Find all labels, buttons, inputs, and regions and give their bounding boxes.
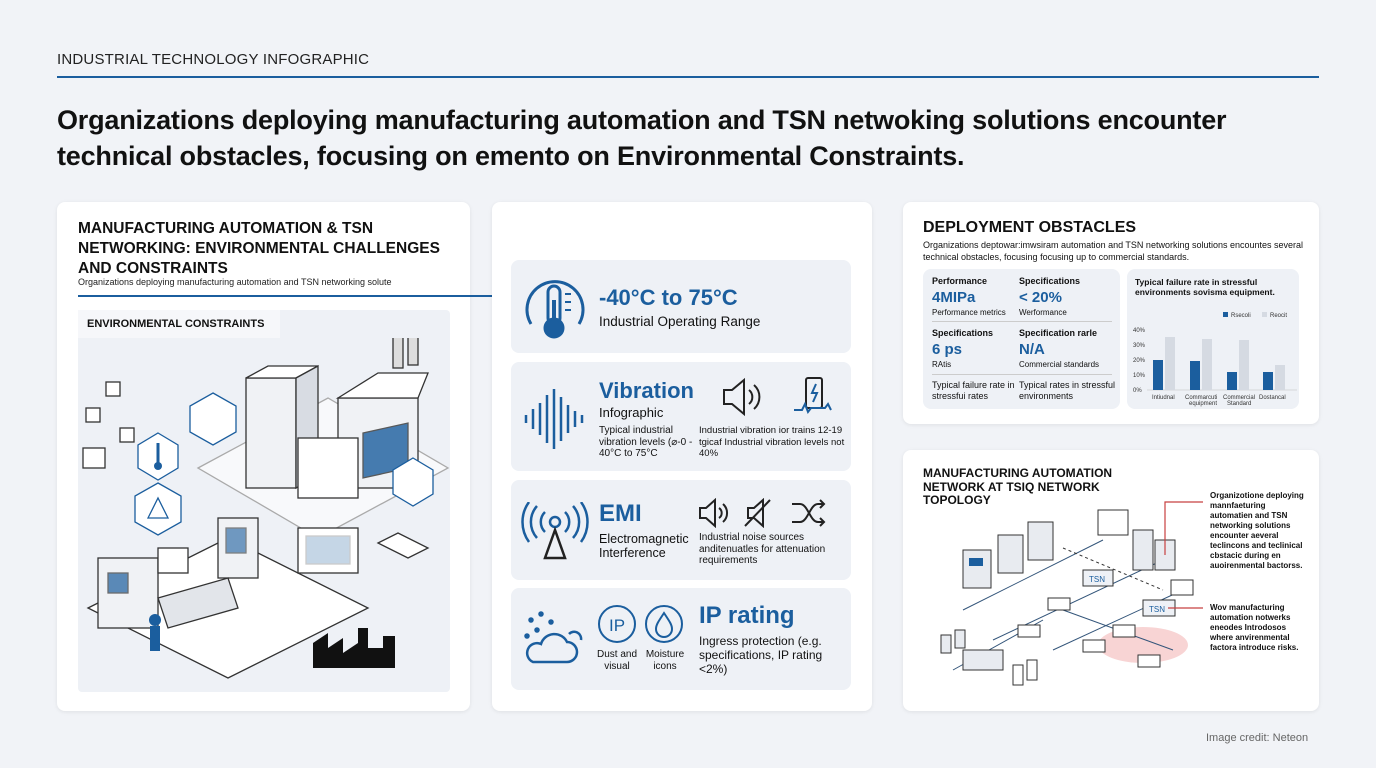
metrics grid: Typical rates in stressful environments <box>1019 380 1115 401</box>
metrics grid: RAtis <box>932 360 951 369</box>
icon: waveform <box>524 389 584 449</box>
metrics grid: Werformance <box>1019 308 1067 317</box>
bar chart: 0% <box>1133 388 1142 394</box>
metrics grid: N/A <box>1019 341 1045 358</box>
IP heading: IP rating <box>699 602 795 629</box>
bar chart: 20% <box>1133 358 1146 364</box>
metrics grid: Typical failure rate in stressfui rates <box>932 380 1015 401</box>
icon: antenna <box>521 502 589 560</box>
metrics grid <box>923 269 1120 409</box>
network diagram <box>940 510 1194 686</box>
panel heading: MANUFACTURING AUTOMATION & TSN NETWORKING: ENVIRONMENTAL CHALLENGES AND CONSTRAINTS <box>78 220 440 277</box>
card: EMI <box>511 480 851 580</box>
panel subtitle: Organizations deploying manufacturing automation and TSN networking solute <box>78 277 392 287</box>
metrics grid: Commercial standards <box>1019 360 1099 369</box>
network diagram: TSN <box>1149 605 1165 614</box>
label: environmental constraints: ENVIRONMENTAL CONSTRAINTS <box>87 318 264 330</box>
icons: speaker and phone <box>723 377 832 416</box>
icon: IP badge: IP <box>609 616 625 635</box>
card: IP rating: Moisture icons <box>646 649 684 672</box>
metrics grid: Performance <box>932 276 987 286</box>
bar chart: Commercial <box>1223 395 1255 401</box>
description: Organizations deptowar:imwsiram automation and TSN networking solutions encountes several technical obstacles, focusing focusing up to commercial standards. <box>923 240 1303 262</box>
panel: environmental factors <box>492 202 872 711</box>
metrics grid: Specification rarle <box>1019 328 1097 338</box>
callout lines <box>1164 501 1203 609</box>
icon captions: Dust and visual <box>597 649 637 672</box>
isometric factory illustration <box>82 338 450 679</box>
callout text 1: Organizotione deploying mannfaeturing automatien and TSN networking solutions encounter aeveral teclincons and teclinical cbstacic during en auoirenmental bactorss. <box>1210 491 1304 570</box>
EMI label <box>599 532 689 560</box>
card: vibration <box>511 362 851 471</box>
bar chart: Standard <box>1227 401 1251 407</box>
bar chart: Dostancal <box>1259 395 1286 401</box>
bar chart: Typical failure rate in stressful environments sovisma equipment. <box>1135 277 1275 297</box>
callout text 2: Wov manufacturing automation notwerks eneodes Introdosos where anvirenmental factora introduce risks. <box>1210 603 1298 652</box>
kicker: INDUSTRIAL TECHNOLOGY INFOGRAPHIC <box>57 51 369 68</box>
temperature value: -40°C to 75°C <box>599 285 738 310</box>
bar chart: Commarcuti <box>1185 395 1217 401</box>
metrics grid: Specifications <box>1019 276 1080 286</box>
title: Organizations deploying manufacturing automation and TSN netwoking solutions encounter technical obstacles, focusing on emento on Environmental Constraints. <box>57 105 1226 171</box>
panel: network topology <box>903 450 1319 711</box>
bar chart: equipment <box>1189 401 1217 407</box>
illustration box <box>78 310 450 692</box>
panel: environmental constraints <box>57 202 470 711</box>
card: temperature <box>511 260 851 353</box>
heading: MANUFACTURING AUTOMATION NETWORK AT TSIQ NETWORK TOPOLOGY <box>923 466 1112 507</box>
bar chart: Rsecoli <box>1231 313 1251 319</box>
icon: IP badge <box>598 605 683 643</box>
bar chart: Intiudnal <box>1152 395 1175 401</box>
divider line under left header <box>78 295 492 297</box>
EMI label: Interference <box>599 546 666 560</box>
metrics grid: 4MIPa <box>932 289 975 306</box>
panel: deployment obstacles <box>903 202 1319 424</box>
icon: dust cloud <box>524 611 582 664</box>
card: vibration: Infographic <box>599 405 663 420</box>
vibration heading: Vibration <box>599 378 694 403</box>
vibration text: Typical industrial vibration levels (⌀-0 - 40°C to 75°C <box>599 425 692 459</box>
credit: Image credit: Neteon <box>1206 732 1308 744</box>
metrics grid: < 20% <box>1019 289 1062 306</box>
heading: DEPLOYMENT OBSTACLES <box>923 219 1136 236</box>
bar chart: 40% <box>1133 328 1146 334</box>
vibration text 2: Industrial vibration ior trains 12-19 tgicaf Industrial vibration levels not 40% <box>699 425 844 459</box>
icon: thermometer gauge <box>525 280 584 338</box>
card: IP rating <box>511 588 851 690</box>
EMI heading: EMI <box>599 500 642 527</box>
label: environmental constraints <box>78 310 280 338</box>
metrics grid: 6 ps <box>932 341 962 358</box>
metrics grid: Performance metrics <box>932 308 1006 317</box>
icons: speaker, mute, shuffle <box>699 498 826 528</box>
metrics grid: Specifications <box>932 328 993 338</box>
temperature label: Industrial Operating Range <box>599 314 760 329</box>
bar chart <box>1127 269 1299 409</box>
network diagram: TSN <box>1089 575 1105 584</box>
bar chart: Reocit <box>1270 313 1287 319</box>
EMI text: Industrial noise sources anditenuatles for attenuation requirements <box>699 532 825 566</box>
bar chart: 10% <box>1133 373 1146 379</box>
EMI label: Electromagnetic <box>599 532 689 546</box>
IP text: Ingress protection (e.g. specifications, IP rating <2%) <box>699 634 822 676</box>
bar chart: 30% <box>1133 343 1146 349</box>
